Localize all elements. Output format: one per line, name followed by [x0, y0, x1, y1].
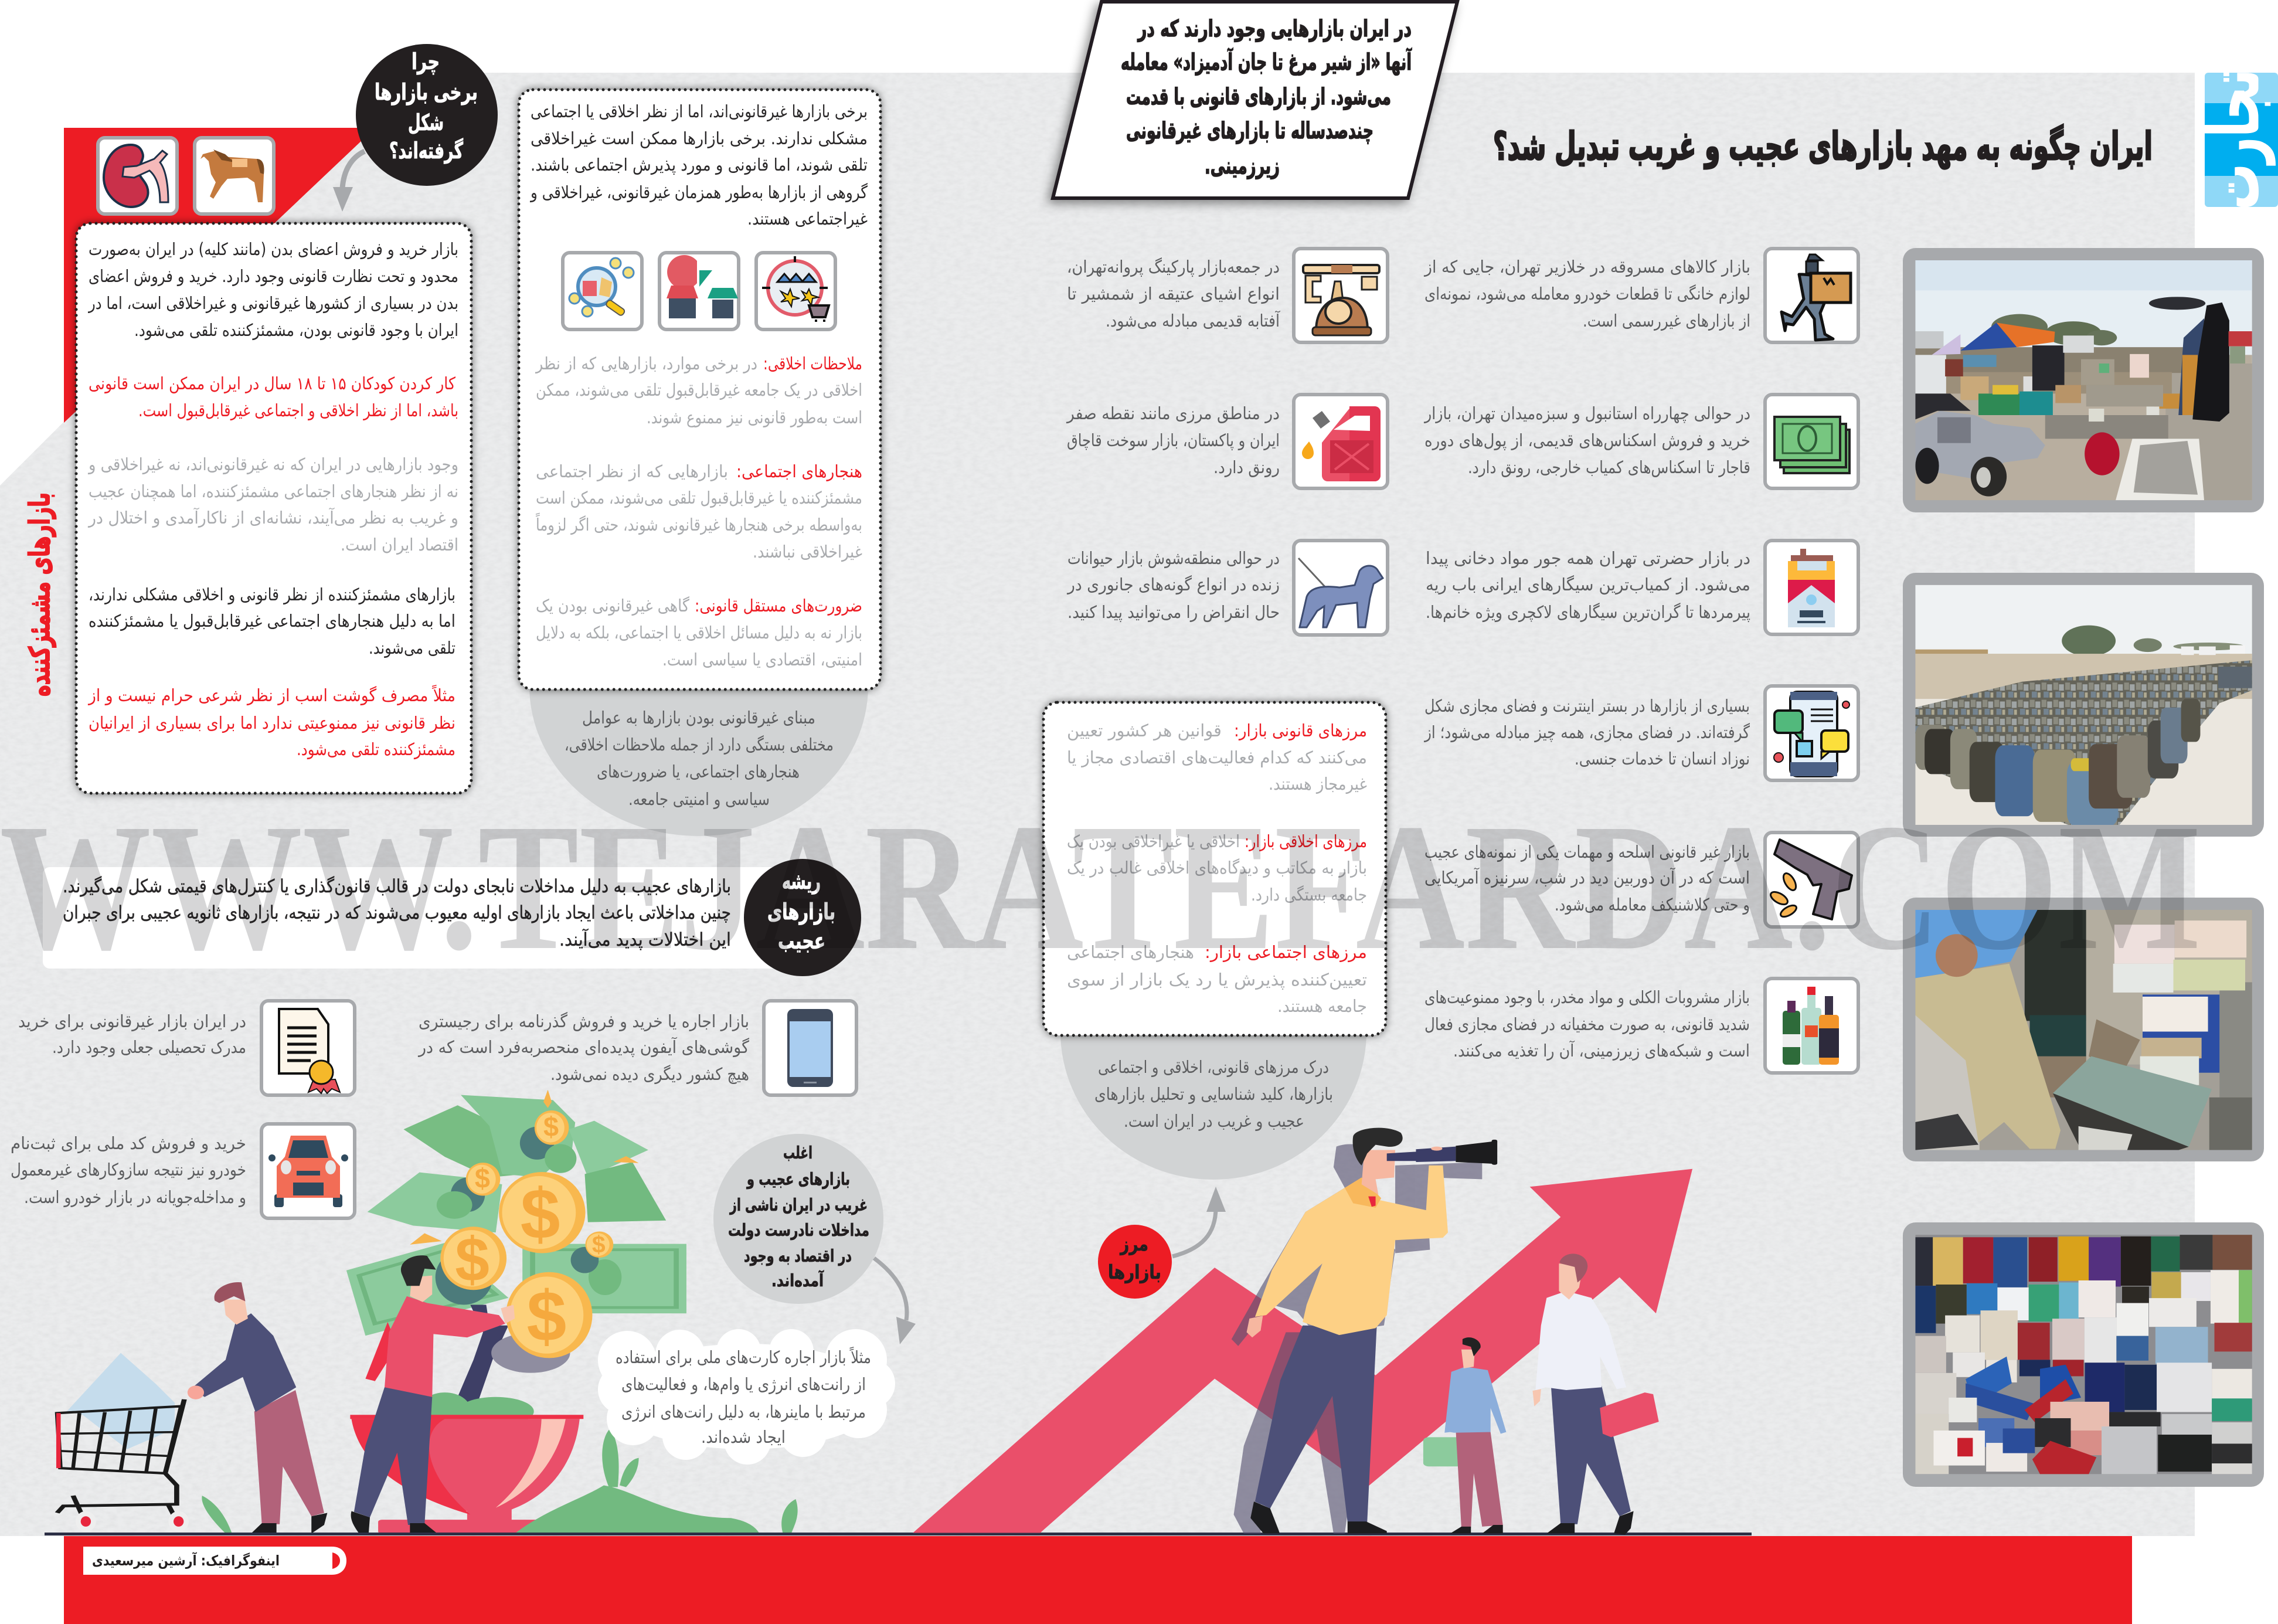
text: horse meat: مثلاً مصرف گوشت اسب از نظر شرعی حرام نیست و از	[87, 685, 455, 705]
callout: cloud example: از رانت‌های انرژی یا وام‌ها، و فعالیت‌های	[621, 1374, 866, 1394]
text: strange markets: اقتصاد ایران است.	[341, 535, 458, 555]
icon: pistol and bullets	[1765, 833, 1858, 927]
icon: horse	[195, 138, 274, 214]
icon: dog on leash	[1294, 541, 1388, 635]
item: fake degrees	[18, 1001, 355, 1095]
icon: target customers	[756, 253, 835, 329]
text: horse meat	[87, 685, 455, 759]
money tree leaves	[346, 1090, 686, 1336]
text: online: نوزاد انسان تا خدمات جنسی.	[1575, 749, 1750, 769]
panel: gray half circle market borders: درک مرزهای قانونی، اخلاقی و اجتماعی	[1098, 1057, 1329, 1077]
panel: gray circle cause note: مداخلات نادرست دولت	[728, 1220, 869, 1240]
man with shopping cart	[188, 1282, 327, 1534]
text: antiques: انواع اشیای عتیقه از شمشیر تا	[1067, 284, 1280, 304]
item: weapons market	[1424, 833, 1858, 927]
callout: cloud example	[598, 1329, 895, 1465]
panel: roots of strange markets	[43, 859, 861, 976]
panel: roots of strange markets: بازارهای عجیب به دلیل مداخلات نابجای دولت در قالب قانون‌گذاری یا کنترل‌های قیمتی شکل می‌گیرند.	[63, 876, 731, 897]
panel: gray circle cause note: بازارهای عجیب و	[746, 1169, 850, 1189]
text: online: گرفته‌اند. در فضای مجازی، همه چیز مبادله می‌شود؛ از	[1423, 722, 1750, 742]
coins	[440, 1110, 613, 1373]
badge: why markets formed: گرفته‌اند؟	[389, 138, 464, 164]
coins: $	[455, 1225, 489, 1294]
text: iPhone: هیچ کشور دیگری دیده نمی‌شود.	[550, 1064, 749, 1084]
text: ethical considerations: ملاحظات اخلاقی:	[763, 354, 862, 373]
panel: market borders card: بازار به مکاتب و دیدگاه‌های اخلاقی غالب در یک	[1067, 858, 1367, 878]
text: intro paragraph: مشکلی ندارند. برخی بازارها ممکن است غیراخلاقی	[531, 128, 868, 148]
badge: why markets formed	[356, 44, 498, 186]
illustration: growth arrow and people	[913, 1128, 1692, 1534]
man with telescope	[1247, 1128, 1497, 1534]
text: repugnant definition: اما به دلیل هنجارهای اجتماعی غیرقابل‌قبول یا مشمئزکننده	[89, 611, 455, 631]
item: national ID sale	[11, 1124, 355, 1218]
item: iPhone passport registry	[417, 1001, 856, 1095]
text: strange markets: و غریب به نظر می‌آیند، نشانه‌ای از ناکارآمدی و اختلال در	[87, 507, 458, 528]
text: social norms: بازارهایی که از نظر اجتماعی	[536, 461, 728, 481]
arrow: badge to borders note	[1172, 1187, 1226, 1256]
text: stolen goods: بازار کالاهای مسروقه در خلازیر تهران، جایی که از	[1423, 257, 1750, 277]
panel: roots of strange markets: چنین مداخلاتی باعث ایجاد بازارهای اولیه معیوب می‌شوند که در نتیجه، بازارهای ثانویه عجیبی برای جبران	[63, 902, 731, 923]
coins: $	[527, 1276, 566, 1356]
text: social norms: به‌واسطه برخی هنجارها غیرقانونی شوند، حتی اگر لزوماً	[536, 513, 862, 535]
text: online: بسیاری از بازارها در بستر اینترنت و فضای مجازی شکل	[1424, 696, 1750, 716]
text: alcohol: شدید قانونی، به صورت مخفیانه در فضای مجازی فعال	[1424, 1014, 1750, 1034]
text: degrees: مدرک تحصیلی جعلی وجود دارد.	[52, 1037, 246, 1057]
text: organ trade	[87, 239, 458, 340]
man in red shirt	[351, 1255, 515, 1534]
panel: market borders card: مرزهای اجتماعی بازار:	[1205, 942, 1367, 962]
tall man with red bag	[1532, 1253, 1659, 1534]
text: fuel: در مناطق مرزی مانند نقطه صفر	[1066, 403, 1280, 423]
badge: roots: ریشه	[782, 868, 821, 894]
text: weapons: و حتی کلاشنیکف معامله می‌شود.	[1555, 895, 1750, 915]
callout: cloud example: مرتبط با ماینرها، به دلیل رانت‌های انرژی	[621, 1402, 866, 1422]
text: repugnant definition	[89, 585, 455, 658]
text: weapons: است که در آن دوربین دید در شب، سرنیزه آمریکایی	[1424, 867, 1750, 888]
text: independent legal necessities: امنیتی، اقتصادی یا سیاسی است.	[662, 650, 862, 670]
text: online	[1423, 696, 1750, 769]
text: iPhone	[417, 1011, 749, 1084]
arrow: badge to card	[333, 151, 365, 212]
text: ethical considerations: در برخی موارد، بازارهایی که از نظر	[535, 354, 757, 373]
text: antiques: آفتابه قدیمی مبادله می‌شود.	[1106, 310, 1281, 331]
panel: gray circle cause note: آمده‌اند.	[771, 1270, 824, 1290]
credit label	[83, 1547, 346, 1575]
text: ethical considerations: است به‌طور قانونی نیز ممنوع شوند.	[647, 407, 862, 427]
text: organ trade: ایران با وجود قانونی بودن، مشمئزکننده تلقی می‌شود.	[134, 320, 458, 340]
logo: تجارت	[2194, 69, 2275, 210]
ground line	[45, 1533, 1752, 1535]
text: wildlife: زنده در انواع گونه‌های جانوری در	[1066, 575, 1280, 594]
text: national ID: خودرو نیز نتیجه سازوکارهای غیرمعمول	[11, 1160, 246, 1180]
panel: gray circle cause note: در اقتصاد به وجود	[744, 1246, 852, 1266]
text: weapons: بازار غیر قانونی اسلحه و مهمات یکی از نمونه‌های عجیب	[1424, 842, 1750, 862]
panel: gray half circle illegality: مبنای غیرقانونی بودن بازارها به عوامل	[582, 708, 815, 728]
red corner triangle	[64, 128, 375, 423]
coins: $	[543, 1112, 559, 1142]
illustration: money tree and shoppers	[57, 1090, 798, 1534]
text: independent legal necessities: گاهی غیرقانونی بودن یک	[536, 596, 689, 616]
text: repugnant definition: بازارهای مشمئزکننده از نظر قانونی و اخلاقی مشکلی ندارند،	[89, 585, 455, 604]
callout: intro parallelogram: می‌شود. از بازارهای قانونی با قدمت	[1126, 84, 1391, 110]
panel: market borders card: تعیین‌کننده پذیرش یا رد یک بازار از سوی	[1067, 970, 1367, 990]
icon: legal and illegal shops	[659, 253, 739, 329]
text: strange markets: نه از نظر هنجارهای اجتماعی مشمئزکننده، اما همچنان عجیب	[89, 481, 458, 501]
text: iPhone: گوشی‌های آیفون پدیده‌ای منحصربه‌فرد است که در	[417, 1037, 749, 1058]
text: ethical considerations	[535, 354, 862, 427]
callout: intro parallelogram: چندصدساله تا بازارهای غیرقانونی	[1126, 118, 1373, 144]
text: fuel: رونق دارد.	[1213, 457, 1280, 477]
red footer band	[64, 1536, 2132, 1624]
text: intro paragraph: تلقی شوند، اما قانونی و مورد پذیرش اجتماعی باشند.	[531, 155, 868, 175]
panel: gray circle cause note	[713, 1134, 883, 1304]
text: cigarettes: در بازار حضرتی تهران همه جور مواد دخانی پیدا	[1426, 548, 1750, 569]
text: wildlife: در حوالی منطقه‌شوش بازار حیوانات	[1067, 548, 1280, 568]
panel: gray half circle illegality: سیاسی و امنیتی جامعه.	[628, 789, 770, 809]
callout: intro parallelogram: آنها «از شیر مرغ تا جان آدمیزاد» معامله	[1121, 47, 1412, 76]
panel: market borders card: جامعه بستگی دارد.	[1251, 885, 1367, 905]
text: horse meat: مشمئزکننده تلقی می‌شود.	[297, 739, 455, 759]
panel: gray half circle illegality: هنجارهای اجتماعی، یا ضرورت‌های	[597, 762, 800, 782]
badge: roots: بازارهای	[767, 899, 835, 925]
panel: photo flea market	[1903, 248, 2264, 512]
callout: intro parallelogram: در ایران بازارهایی وجود دارند که در	[1137, 16, 1412, 42]
badge: why markets formed: برخی بازارها	[375, 79, 478, 105]
text: stolen goods: لوازم خانگی تا قطعات خودرو معامله می‌شود، نمونه‌ای	[1424, 284, 1750, 304]
panel: gray half circle illegality	[529, 536, 868, 836]
panel: gray half circle market borders: بازارها، کلید شناسایی و تحلیل بازارهای	[1094, 1084, 1333, 1104]
text: wildlife: حال انقراض را می‌توانید پیدا کنید.	[1067, 602, 1280, 623]
item: antiques market	[1067, 249, 1388, 342]
icon: antique telephone	[1294, 249, 1388, 342]
panel: photo cigarettes	[1903, 1222, 2264, 1487]
badge: market borders: مرز	[1119, 1232, 1148, 1256]
shopping cart with ID cards	[57, 1353, 189, 1532]
panel: gray half circle illegality: مختلفی بستگی دارد از جمله ملاحظات اخلاقی،	[565, 735, 834, 755]
text: banknotes: قاجار تا اسکناس‌های کمیاب خارجی، رونق دارد.	[1468, 457, 1750, 477]
text: independent legal necessities	[536, 596, 862, 670]
trunk	[450, 1304, 508, 1415]
item: antique banknote market	[1423, 395, 1858, 488]
panel: gray circle cause note: اغلب	[783, 1143, 812, 1163]
item: alcohol market	[1424, 979, 1858, 1073]
text: iPhone: بازار اجاره یا خرید و فروش گذرنامه برای رجیستری	[419, 1011, 749, 1031]
text: antiques: در جمعه‌بازار پارکینگ پروانه‌تهران،	[1067, 257, 1280, 277]
badge: market borders	[1098, 1225, 1172, 1299]
big rising arrow	[913, 1169, 1692, 1533]
text: national ID	[11, 1133, 246, 1207]
text: strange markets: وجود بازارهایی در ایران که نه غیرقانونی‌اند، نه غیراخلاقی و	[87, 454, 458, 474]
callout: intro parallelogram: زیرزمینی.	[1205, 153, 1280, 179]
text: alcohol: است و شبکه‌های زیرزمینی، آن را تغذیه می‌کنند.	[1453, 1040, 1750, 1061]
text: stolen goods: از بازارهای غیررسمی است.	[1583, 311, 1750, 331]
panel: market borders card: جامعه هستند.	[1277, 996, 1367, 1016]
small man with green bag	[1423, 1337, 1506, 1534]
text: intro paragraph: برخی بازارها غیرقانونی‌اند، اما از نظر اخلاقی یا اجتماعی	[531, 101, 868, 121]
icon: kidney	[98, 138, 177, 214]
text: degrees	[18, 1011, 246, 1057]
badge: market borders: بازارها	[1108, 1261, 1161, 1283]
panel: gray circle cause note: غریب در ایران ناشی از	[729, 1195, 868, 1215]
text: child labour	[89, 373, 458, 420]
text: strange markets	[87, 454, 458, 555]
text: weapons	[1424, 842, 1750, 915]
text: ethical considerations: اخلاقی در یک جامعه غیرقابل‌قبول تلقی می‌شوند، ممکن	[536, 380, 862, 400]
logo	[2205, 73, 2278, 207]
icon: magnifier over people	[563, 253, 642, 329]
coins: $	[475, 1163, 490, 1194]
icon: smartphone with chat	[1765, 686, 1858, 780]
text: antiques	[1067, 257, 1281, 331]
badge: roots	[744, 859, 861, 976]
text: banknotes: خرید و فروش اسکناس‌های قدیمی، از پول‌های دوره	[1424, 430, 1750, 451]
text: stolen goods	[1423, 257, 1750, 331]
text: national ID: و مداخله‌جویانه در بازار خودرو است.	[24, 1187, 246, 1207]
panel: repugnant markets card	[76, 223, 471, 793]
panel: market borders card: قوانین هر کشور تعیین	[1067, 721, 1222, 740]
panel: gray half circle market borders	[1060, 884, 1366, 1180]
item: cigarette market	[1426, 541, 1858, 634]
icon: certificate	[261, 1001, 355, 1095]
text: intro paragraph: غیراجتماعی هستند.	[747, 209, 868, 229]
callout: intro parallelogram	[1053, 2, 1457, 198]
panel: market borders card: می‌کنند که کدام فعالیت‌های اقتصادی مجاز یا	[1067, 748, 1367, 767]
text: child labour: کار کردن کودکان ۱۵ تا ۱۸ سال در ایران ممکن است قانونی	[89, 373, 455, 393]
panel: illegal markets card	[519, 90, 880, 689]
item: wildlife market	[1066, 541, 1388, 635]
text: banknotes: در حوالی چهارراه استانبول و سبزه‌میدان تهران، بازار	[1423, 403, 1750, 423]
panel: market borders card: هنجارهای اجتماعی	[1067, 942, 1194, 962]
text: independent legal necessities: ضرورت‌های مستقل قانونی:	[695, 596, 862, 616]
text: horse meat: نظر قانونی نیز ممنوعیتی ندارد اما برای بسیاری از ایرانیان	[89, 713, 455, 733]
panel: market borders card: مرزهای اخلاقی بازار:	[1245, 831, 1367, 851]
text: intro paragraph: گروهی از بازارها به‌طور همزمان غیرقانونی، غیراخلاقی و	[529, 182, 868, 202]
text: repugnant definition: تلقی می‌شوند.	[369, 638, 455, 658]
callout: cloud example: مثلاً بازار اجاره کارت‌های ملی برای استفاده	[616, 1347, 871, 1367]
text: fuel: ایران و پاکستان، بازار سوخت قاچاق	[1067, 430, 1280, 451]
text: intro paragraph	[529, 101, 868, 229]
text: alcohol: بازار مشروبات الکلی و مواد مخدر، با وجود ممنوعیت‌های	[1424, 987, 1750, 1007]
text: social norms: هنجارهای اجتماعی:	[736, 461, 862, 481]
badge: why markets formed: شکل	[408, 110, 444, 135]
text: organ trade: بازار خرید و فروش اعضای بدن (مانند کلیه) در ایران به‌صورت	[89, 239, 458, 259]
text: child labour: باشد، اما از نظر اخلاقی و اجتماعی غیرقابل‌قبول است.	[138, 400, 458, 420]
panel: gray half circle market borders: عجیب و غریب در ایران است.	[1124, 1111, 1304, 1131]
badge: why markets formed: چرا	[412, 49, 440, 74]
panel: market borders card: اخلاقی یا غیراخلاقی بودن یک	[1067, 831, 1240, 851]
panel: market borders card: مرزهای قانونی بازار:	[1234, 721, 1367, 740]
hill and plants	[202, 1429, 798, 1534]
text: banknotes	[1423, 403, 1750, 477]
icon: smartphone	[764, 1001, 856, 1095]
panel: photo fuel barrels	[1903, 573, 2264, 837]
text: degrees: در ایران بازار غیرقانونی برای خرید	[18, 1011, 246, 1031]
coins: $	[592, 1231, 606, 1258]
item: online market	[1423, 686, 1858, 780]
icon: banknotes	[1765, 395, 1858, 488]
text: independent legal necessities: بازار نه به دلیل مسائل اخلاقی یا اجتماعی، بلکه به دلایل	[536, 623, 862, 643]
text: national ID: خرید و فروش کد ملی برای ثبت‌نام	[11, 1133, 246, 1153]
text: cigarettes: می‌شود. از کمیاب‌ترین سیگارهای ایرانی باب ریه	[1426, 575, 1750, 594]
text: fuel	[1066, 403, 1280, 477]
text: cigarettes	[1426, 548, 1750, 623]
panel: market borders card	[1043, 702, 1386, 1035]
item: stolen goods market	[1423, 249, 1858, 342]
text: organ trade: محدود و تحت نظارت قانونی وجود دارد. خرید و فروش اعضای	[89, 266, 458, 286]
coins: $	[521, 1174, 560, 1253]
item: smuggled fuel market	[1066, 395, 1388, 488]
vertical heading: repugnant markets: بازارهای مشمئزکننده	[23, 492, 56, 697]
text: organ trade: بدن در بسیاری از کشورها غیرقانونی و غیراخلاقی است، اما در	[87, 293, 458, 313]
panel: photo banknote seller	[1903, 898, 2264, 1161]
text: social norms: مشمئزکننده یا غیرقابل‌قبول تلقی می‌شوند، ممکن است	[536, 488, 862, 508]
text: cigarettes: پیرمردها تا گران‌ترین سیگارهای لاکچری ویژه خانم‌ها.	[1426, 602, 1750, 623]
icon: red car	[261, 1124, 355, 1218]
credit label: اینفوگرافیک: آرشین میرسعیدی	[92, 1552, 280, 1569]
callout: cloud example: ایجاد شده‌اند.	[701, 1427, 786, 1447]
pot	[350, 1392, 583, 1534]
text: social norms	[536, 461, 862, 562]
arrow: note to cloud	[874, 1258, 916, 1344]
text: alcohol	[1424, 987, 1750, 1061]
icon: running man with box	[1765, 249, 1858, 342]
badge: roots: عجیب	[778, 928, 825, 954]
icon: red jerry can	[1294, 395, 1388, 488]
icon: cigarette pack	[1765, 541, 1858, 634]
panel: market borders card: غیرمجاز هستند.	[1269, 774, 1367, 794]
man shadow	[1232, 1144, 1482, 1534]
icon: bottles	[1765, 979, 1858, 1073]
text: wildlife	[1066, 548, 1280, 623]
text: social norms: غیراخلاقی نباشند.	[753, 542, 862, 562]
panel: roots of strange markets: این اختلالات پدید می‌آیند.	[559, 928, 731, 950]
